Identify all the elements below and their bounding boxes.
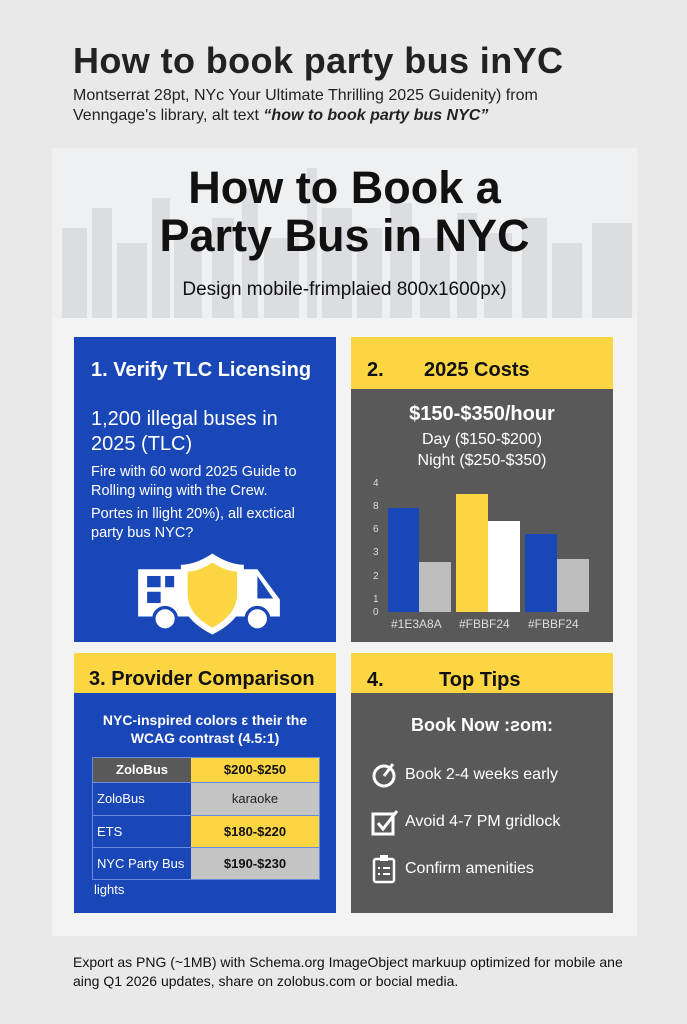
tip 2: Avoid 4-7 PM gridlock xyxy=(405,813,560,830)
main heading xyxy=(159,162,530,261)
body text 2 xyxy=(91,506,295,541)
bar chart: 2 xyxy=(373,571,379,582)
panel: 2025 costs xyxy=(351,337,613,642)
price text: $150-$350/hour xyxy=(409,403,555,425)
main heading: How to Book a xyxy=(188,162,501,213)
bar chart: #1E3A8A xyxy=(391,617,442,631)
note text: NYC-inspired colors ε their the xyxy=(103,712,307,728)
stat text: 2025 (TLC) xyxy=(91,433,192,455)
icon: bus with shield xyxy=(138,554,280,634)
tip 1: Book 2-4 weeks early xyxy=(405,766,558,783)
panel: provider comparison xyxy=(74,653,336,913)
comparison table: karaoke xyxy=(232,791,278,806)
header 4 xyxy=(351,653,613,693)
tip 3: Confirm amenities xyxy=(405,860,534,877)
body text xyxy=(91,464,297,499)
bar chart: #FBBF24 xyxy=(528,617,579,631)
body text: Fire with 60 word 2025 Guide to xyxy=(91,464,297,480)
skyline banner xyxy=(62,168,632,318)
body text 2: party bus NYC? xyxy=(91,525,193,541)
comparison table: $200-$250 xyxy=(224,762,286,777)
top title: How to book party bus inYC xyxy=(73,40,563,81)
bar chart: 8 xyxy=(373,501,379,512)
comparison table: ZoloBus xyxy=(97,791,145,806)
header 4: 4. xyxy=(367,669,384,691)
comparison table: NYC Party Bus xyxy=(97,856,184,871)
subtitle text: Montserrat 28pt, NYc Your Ultimate Thrilling 2025 Guidenity) from Venngage's library, alt text “how to book party bus NYC” xyxy=(73,87,538,124)
bar chart: 6 xyxy=(373,524,379,535)
panel: 2025 costs: Night ($250-$350) xyxy=(418,452,546,469)
bar chart xyxy=(373,478,589,631)
heading 1: 1. Verify TLC Licensing xyxy=(91,359,311,381)
comparison table: $180-$220 xyxy=(224,824,286,839)
footer text: Export as PNG (~1MB) with Schema.org ImageObject markuup optimized for mobile ane aing Q1 2026 updates, share on zolobus.com or bocial media. xyxy=(73,954,623,989)
header 3 xyxy=(74,653,336,693)
header 3: 3. Provider Comparison xyxy=(89,668,315,690)
main heading: Party Bus in NYC xyxy=(159,210,530,261)
stat text: 1,200 illegal buses in xyxy=(91,408,278,430)
tip 3 xyxy=(372,855,534,884)
panel: top tips xyxy=(351,653,613,913)
lights text: lights xyxy=(94,882,124,897)
note text xyxy=(103,712,307,746)
bar chart: 0 xyxy=(373,607,379,618)
header 2: 2025 Costs xyxy=(424,359,530,381)
design note: Design mobile-frimplaied 800x1600px) xyxy=(182,279,507,300)
comparison table: ETS xyxy=(97,824,122,839)
comparison table: ZoloBus xyxy=(116,762,168,777)
bar chart: #FBBF24 xyxy=(459,617,510,631)
header 2 xyxy=(351,337,613,389)
note text: WCAG contrast (4.5:1) xyxy=(131,730,279,746)
bar chart: 4 xyxy=(373,478,379,489)
stat text xyxy=(91,408,278,455)
tip 1 xyxy=(372,763,558,788)
main card xyxy=(52,148,637,936)
comparison table xyxy=(92,757,320,880)
comparison table: $190-$230 xyxy=(224,856,286,871)
panel: TLC licensing xyxy=(74,337,336,642)
panel: 2025 costs: Day ($150-$200) xyxy=(422,431,542,448)
bar chart: 1 xyxy=(373,594,379,605)
header 2: 2. xyxy=(367,359,384,381)
header 4: Top Tips xyxy=(439,669,520,691)
tip 2 xyxy=(372,810,560,836)
tips heading: Book Now :ƨom: xyxy=(411,715,553,735)
bar chart: 3 xyxy=(373,547,379,558)
body text: Rolling wiing with the Crew. xyxy=(91,483,268,499)
body text 2: Portes in llight 20%), all exctical xyxy=(91,506,295,522)
